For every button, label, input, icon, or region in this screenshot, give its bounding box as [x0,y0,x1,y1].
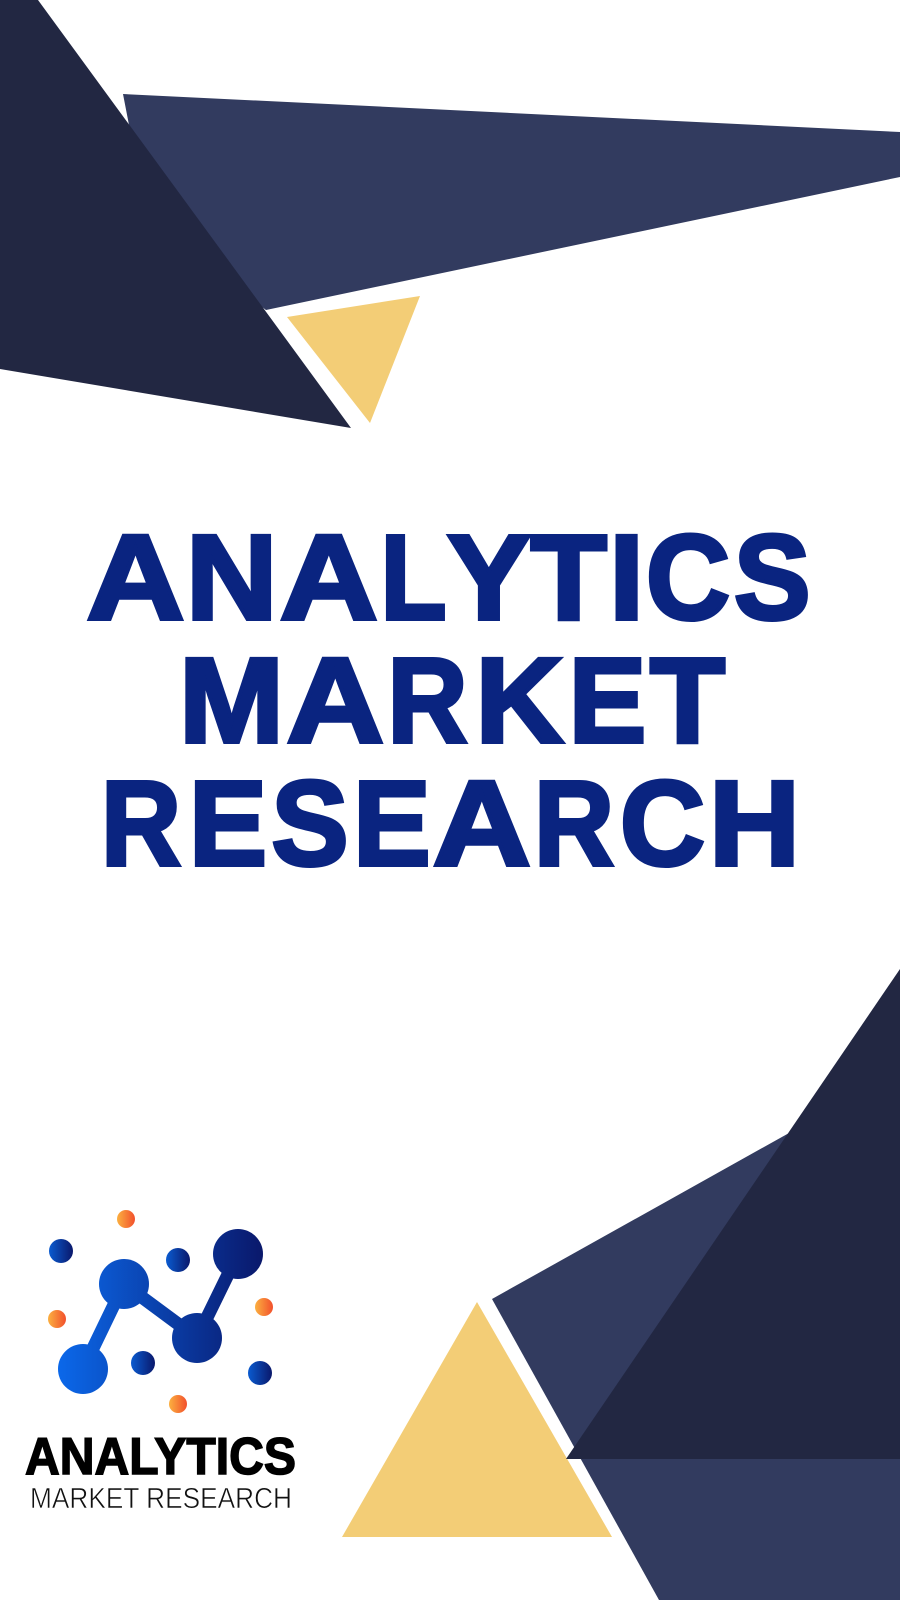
title: T [650,632,725,768]
bottom decoration: mid-blue shard [492,1071,900,1600]
title: C [620,755,705,891]
title: R [534,755,614,891]
title: C [646,509,730,645]
title [86,509,810,891]
title: R [101,755,181,891]
title: I [609,509,644,645]
title: A [286,632,384,768]
title: S [734,509,810,645]
title: A [86,509,184,645]
top decoration: mid-blue shard [123,94,900,310]
logo wordmark: market research: MARKET RESEARCH [30,1483,292,1515]
title: S [272,755,348,891]
title: A [280,509,378,645]
title: Y [447,509,531,645]
title: E [189,755,267,891]
title: L [380,509,446,645]
title: A [433,755,531,891]
top decoration: dark triangle [0,0,351,428]
title: H [709,755,800,891]
logo [25,1210,296,1515]
title: T [531,509,607,645]
title: R [388,632,468,768]
title: N [186,509,278,645]
title: K [476,632,563,768]
title: M [179,632,284,768]
title: E [569,632,646,768]
top decoration: yellow triangle [287,296,420,423]
title: E [353,755,431,891]
logo icon: network chart [48,1210,273,1413]
logo wordmark: analytics: ANALYTICS [25,1428,296,1486]
bottom decoration: yellow triangle [342,1302,612,1537]
bottom decoration: dark triangle [566,969,900,1459]
